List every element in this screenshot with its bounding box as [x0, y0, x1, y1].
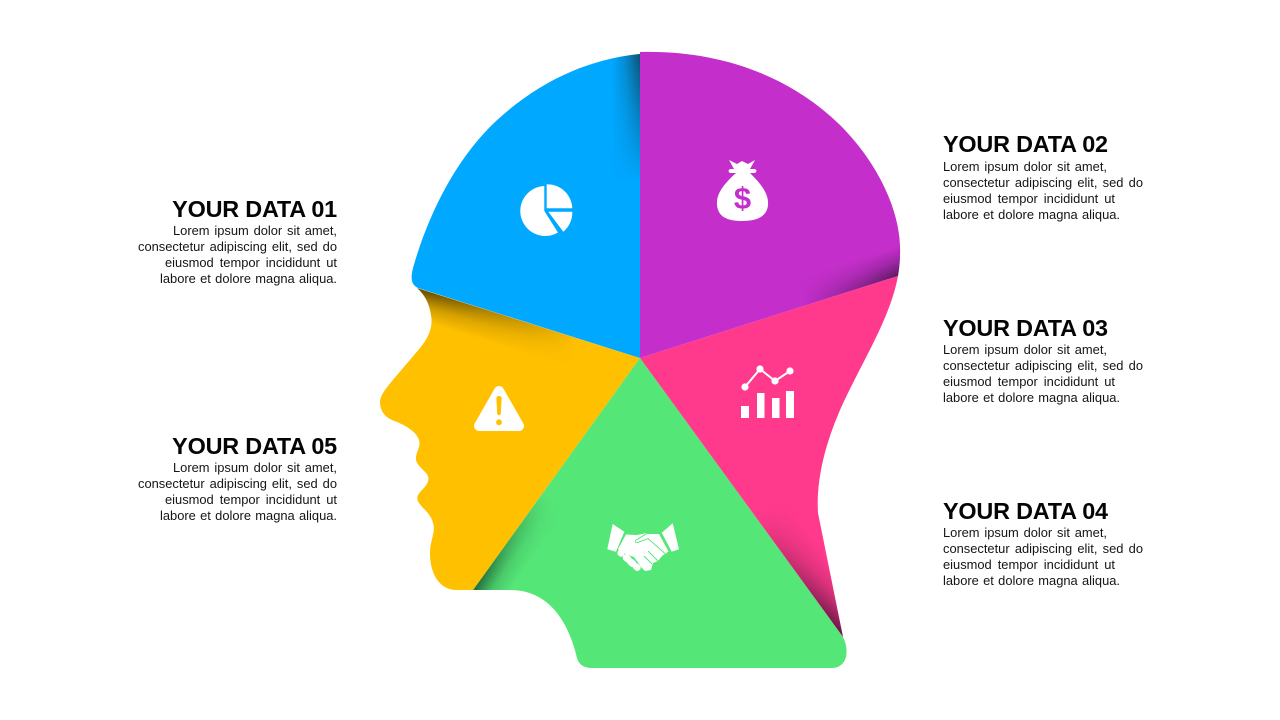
text block: your data 02 — [943, 131, 1143, 222]
text block: your data 04: labore et dolore magna aliqua. — [943, 573, 1120, 588]
text block: your data 03 — [943, 315, 1143, 405]
text block: your data 05: labore et dolore magna aliqua. — [160, 508, 337, 523]
text block: your data 03: Lorem ipsum dolor sit amet, — [943, 342, 1107, 357]
segment: pink back of head — [635, 270, 905, 653]
text block: your data 02: labore et dolore magna aliqua. — [943, 207, 1120, 222]
segment: yellow face — [380, 288, 640, 590]
text block: your data 04: eiusmod tempor incididunt ut — [943, 557, 1115, 572]
segment: green neck — [461, 350, 855, 675]
text block: your data 04 — [943, 498, 1143, 588]
text block: your data 04: YOUR DATA 04 — [943, 498, 1108, 524]
text block: your data 02: consectetur adipiscing elit, sed do — [943, 175, 1143, 190]
icon: money bag: $ — [734, 180, 751, 216]
segment: purple crown — [640, 52, 900, 358]
text block: your data 01 — [138, 196, 337, 286]
text block: your data 02: Lorem ipsum dolor sit amet, — [943, 159, 1107, 174]
icon: warning triangle — [479, 391, 519, 426]
text block: your data 05 — [138, 433, 337, 523]
text block: your data 01: YOUR DATA 01 — [172, 196, 337, 222]
text block: your data 03: labore et dolore magna aliqua. — [943, 390, 1120, 405]
text block: your data 05: consectetur adipiscing elit, sed do — [138, 476, 337, 491]
head diagram — [380, 52, 900, 668]
text block: your data 02: eiusmod tempor incididunt ut — [943, 191, 1115, 206]
text block: your data 01: Lorem ipsum dolor sit amet, — [173, 223, 337, 238]
icon: handshake — [607, 523, 679, 572]
icon: line and bar chart — [741, 365, 794, 418]
text block: your data 03: eiusmod tempor incididunt ut — [943, 374, 1115, 389]
text block: your data 05: Lorem ipsum dolor sit amet, — [173, 460, 337, 475]
icon: pie chart — [520, 184, 572, 236]
segment: blue forehead — [412, 54, 640, 358]
text block: your data 05: YOUR DATA 05 — [172, 433, 337, 459]
text block: your data 01: consectetur adipiscing elit, sed do — [138, 239, 337, 254]
text block: your data 03: consectetur adipiscing elit, sed do — [943, 358, 1143, 373]
text block: your data 05: eiusmod tempor incididunt ut — [165, 492, 337, 507]
text block: your data 03: YOUR DATA 03 — [943, 315, 1108, 341]
text block: your data 04: consectetur adipiscing elit, sed do — [943, 541, 1143, 556]
icon: money bag — [717, 160, 768, 221]
text block: your data 01: eiusmod tempor incididunt ut — [165, 255, 337, 270]
text block: your data 01: labore et dolore magna aliqua. — [160, 271, 337, 286]
text block: your data 02: YOUR DATA 02 — [943, 131, 1108, 157]
text block: your data 04: Lorem ipsum dolor sit amet, — [943, 525, 1107, 540]
